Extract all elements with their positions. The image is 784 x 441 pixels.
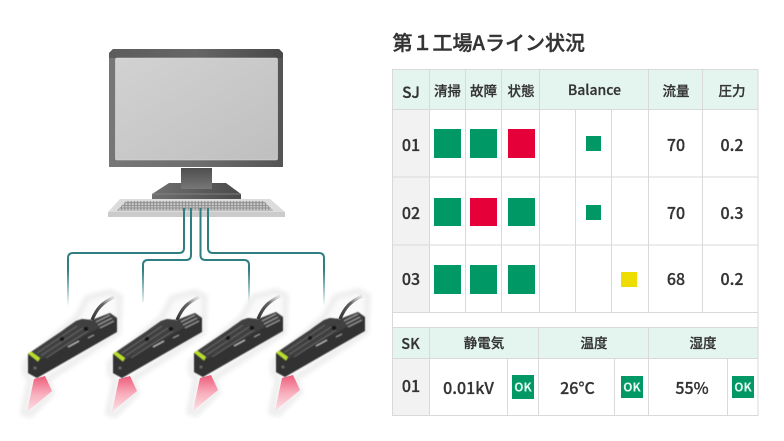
SK row 01: 01	[402, 373, 420, 397]
SK row 01	[402, 373, 709, 399]
computer monitor	[109, 49, 283, 199]
keyboard	[108, 199, 285, 217]
OK badge: static: OK	[514, 378, 532, 396]
sensor 1	[23, 292, 120, 415]
OK badge: humidity: OK	[734, 378, 752, 396]
SK row 01: 55%	[675, 375, 709, 399]
OK badge: humidity	[732, 376, 754, 398]
SK header row	[401, 332, 717, 354]
row 02: 70	[667, 200, 685, 224]
SK header row: 温度	[580, 332, 608, 352]
monitor screen	[116, 58, 278, 160]
row 03: 03	[402, 266, 420, 290]
table header row: 清掃	[434, 80, 461, 100]
row 03: 0.2	[720, 266, 744, 290]
row 02: 02	[402, 200, 420, 224]
row 01: 0.2	[720, 132, 744, 156]
SK row 01: 0.01kV	[443, 375, 494, 399]
row 03: 68	[667, 266, 685, 290]
table header row: 流量	[662, 80, 690, 100]
panel: SJ status table	[392, 70, 758, 312]
panel: SK environment table	[392, 312, 758, 416]
OK badge: temperature	[621, 376, 643, 398]
cables: monitor to sensors	[68, 208, 324, 306]
OK badge: temperature: OK	[623, 378, 641, 396]
table header row: Balance	[568, 80, 621, 100]
SK row 01: 26°C	[560, 375, 595, 399]
OK badge: static	[512, 375, 534, 399]
row 02	[402, 198, 744, 226]
table header row: 状態	[508, 80, 535, 100]
row 02: 0.3	[720, 200, 744, 224]
row 01	[402, 129, 744, 158]
sensor 2	[108, 292, 205, 415]
SK header row: SK	[401, 333, 420, 354]
row 01: 01	[402, 132, 420, 156]
row 03	[402, 265, 744, 294]
SK header row: 湿度	[690, 332, 717, 352]
table header row: SJ	[402, 81, 420, 103]
monitor stand	[152, 168, 241, 199]
sensor 3	[189, 291, 286, 414]
sensor 4	[271, 291, 368, 414]
table header row: 故障	[470, 80, 497, 100]
title: 第１工場Aライン状況	[392, 27, 585, 56]
table header row	[402, 80, 746, 103]
row 01: 70	[667, 132, 685, 156]
table header row: 圧力	[718, 80, 746, 100]
SK header row: 静電気	[464, 332, 504, 352]
